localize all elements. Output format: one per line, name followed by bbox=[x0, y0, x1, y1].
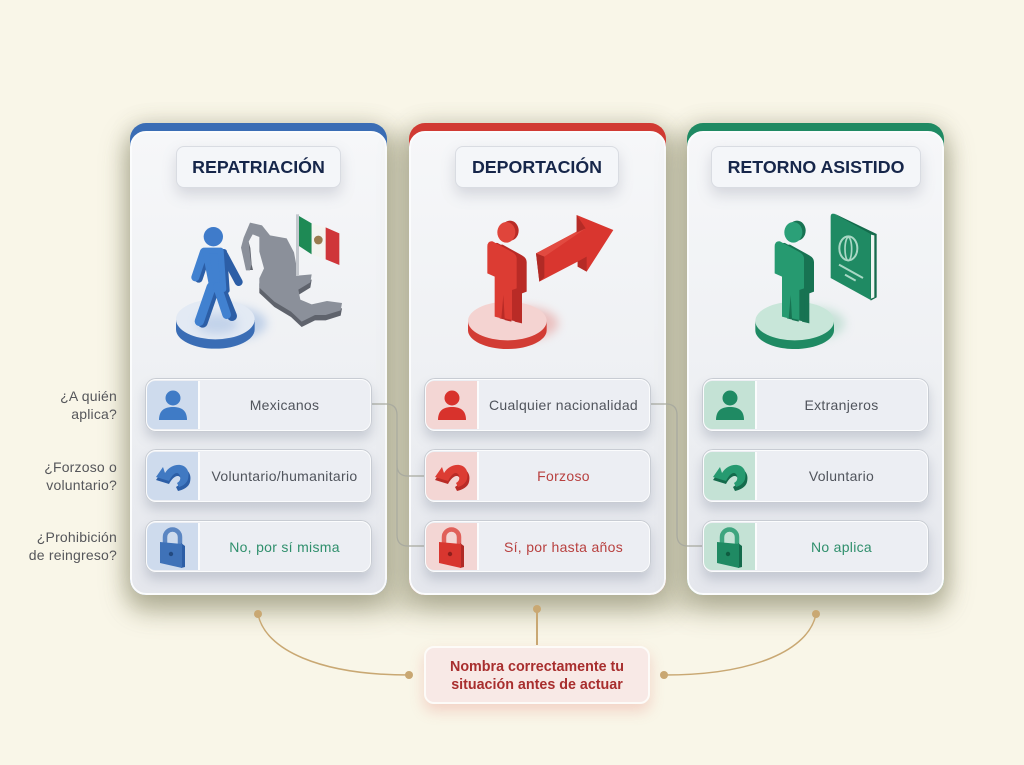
heading: Repatriación bbox=[176, 146, 341, 188]
row: Deportación, forzoso o voluntario: Forzoso bbox=[537, 468, 590, 484]
label: ¿A quién aplica?: aplica? bbox=[71, 406, 117, 422]
platform: blue bbox=[176, 299, 267, 349]
icon: walking person bbox=[195, 227, 239, 323]
callout: Nombra correctamente tu situación antes de actuar: Nombra correctamente tu bbox=[450, 659, 624, 675]
row: Retorno asistido, a quién aplica: Extranjeros bbox=[804, 397, 879, 413]
heading: Retorno asistido: RETORNO ASISTIDO bbox=[728, 157, 904, 177]
row: Retorno asistido, forzoso o voluntario: Voluntario bbox=[809, 468, 874, 484]
row: Repatriación, a quién aplica bbox=[145, 378, 372, 432]
illustration: person and passport bbox=[755, 214, 877, 349]
heading: Retorno asistido bbox=[711, 146, 921, 188]
label: ¿Forzoso o voluntario?: ¿Forzoso o bbox=[44, 459, 117, 475]
row: Repatriación, prohibición de reingreso bbox=[145, 520, 372, 573]
label: ¿Prohibición de reingreso?: de reingreso? bbox=[29, 547, 117, 563]
row: Deportación, prohibición de reingreso bbox=[424, 520, 651, 573]
callout: Nombra correctamente tu situación antes de actuar: situación antes de actuar bbox=[451, 677, 623, 693]
row: Repatriación, forzoso o voluntario bbox=[145, 449, 372, 503]
label: ¿Forzoso o voluntario?: voluntario? bbox=[46, 477, 117, 493]
label: ¿Prohibición de reingreso? bbox=[29, 529, 117, 563]
illustration: person and expulsion arrow bbox=[468, 215, 614, 349]
icon: Mexican flag bbox=[296, 214, 339, 276]
callout: Nombra correctamente tu situación antes de actuar bbox=[424, 646, 650, 704]
row: Deportación, a quién aplica bbox=[424, 378, 651, 432]
row: Retorno asistido, forzoso o voluntario bbox=[702, 449, 929, 503]
heading: Deportación bbox=[455, 146, 619, 188]
label: ¿A quién aplica? bbox=[60, 388, 117, 422]
panel: Retorno asistido bbox=[687, 123, 944, 595]
heading: Deportación: DEPORTACIÓN bbox=[472, 157, 602, 177]
icon: passport bbox=[831, 213, 877, 301]
panel: Repatriación bbox=[130, 123, 387, 595]
label: ¿A quién aplica?: ¿A quién bbox=[60, 388, 117, 404]
row: Repatriación, forzoso o voluntario: Voluntario/humanitario bbox=[212, 468, 357, 484]
icon: standing person bbox=[775, 221, 814, 323]
row: Deportación, forzoso o voluntario bbox=[424, 449, 651, 503]
row: Retorno asistido, prohibición de reingreso: No aplica bbox=[811, 539, 872, 555]
row: Retorno asistido, a quién aplica bbox=[702, 378, 929, 432]
platform: green bbox=[755, 302, 845, 349]
label: ¿Prohibición de reingreso?: ¿Prohibición bbox=[37, 529, 117, 545]
illustration: walking person, map of Mexico and flag bbox=[176, 214, 342, 349]
icon: standing person bbox=[487, 221, 527, 323]
row: Retorno asistido, prohibición de reingreso bbox=[702, 520, 929, 573]
panel: Deportación bbox=[409, 123, 666, 595]
row: Deportación, prohibición de reingreso: Sí, por hasta años bbox=[504, 539, 623, 555]
heading: Repatriación: REPATRIACIÓN bbox=[192, 157, 325, 177]
row: Repatriación, a quién aplica: Mexicanos bbox=[250, 397, 319, 413]
label: ¿Forzoso o voluntario? bbox=[44, 459, 117, 493]
icon: map of Mexico bbox=[241, 223, 342, 327]
row: Deportación, a quién aplica: Cualquier nacionalidad bbox=[489, 397, 638, 413]
icon: red arrow bbox=[536, 215, 613, 282]
row: Repatriación, prohibición de reingreso: No, por sí misma bbox=[229, 539, 340, 555]
platform: red bbox=[468, 302, 558, 349]
